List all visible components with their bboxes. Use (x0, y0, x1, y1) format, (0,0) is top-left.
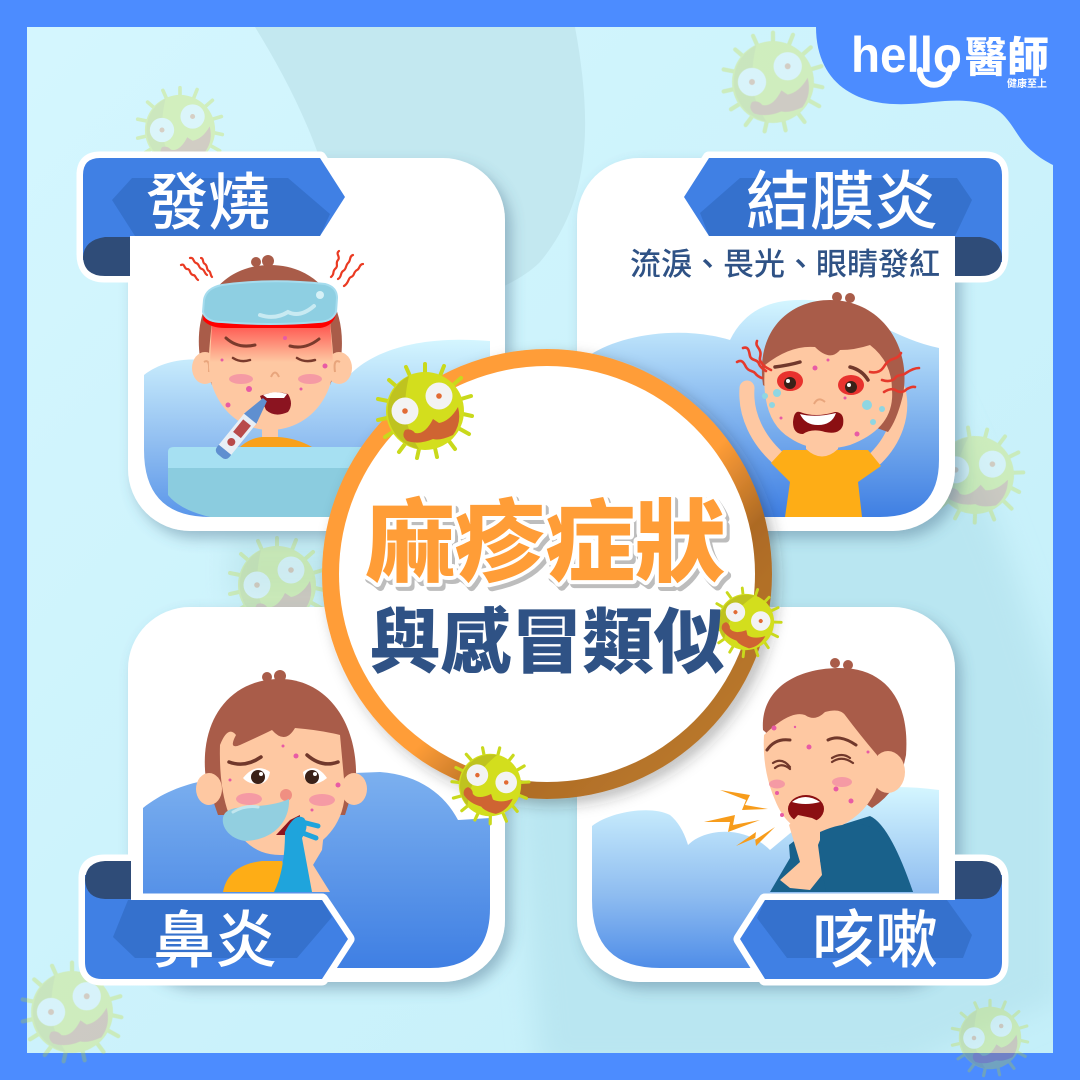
title line 1: 麻疹症狀 (365, 470, 725, 600)
title line 2: 與感冒類似 (369, 586, 725, 688)
panel: conjunctivitis (577, 151, 1002, 531)
germ: top left of badge (378, 364, 472, 458)
illustration backdrop (143, 772, 490, 968)
banner: rhinitis (85, 861, 348, 980)
title shadow: 麻疹症狀 (368, 474, 728, 604)
banner: fever: 發燒 (146, 152, 270, 242)
bed (168, 447, 420, 517)
ice pack (203, 310, 337, 328)
logo: 健康至上 (1007, 75, 1047, 90)
logo: 醫師 (965, 24, 1049, 85)
panel: fever (83, 152, 505, 531)
logo: hello (851, 27, 962, 83)
title text (365, 470, 728, 688)
banner: rhinitis: 鼻炎 (153, 890, 277, 980)
heat squiggles (181, 251, 363, 286)
germ: bottom of badge (437, 732, 543, 838)
banner: conjunctivitis (684, 151, 1002, 276)
boy with red eyes (737, 292, 919, 517)
boy coughing (763, 658, 913, 892)
cough sparks (704, 790, 775, 846)
banner: fever (83, 152, 345, 276)
card (128, 158, 505, 531)
banner: conjunctivitis: 結膜炎 (746, 151, 938, 243)
white disc (339, 366, 755, 782)
logo (816, 24, 1053, 165)
card (128, 607, 505, 982)
subtitle: 流淚、畏光、眼睛發紅 (630, 239, 940, 284)
thermometer (214, 395, 272, 461)
banner: cough: 咳嗽 (812, 890, 938, 981)
illustration backdrop (590, 300, 939, 517)
panel: cough (577, 607, 1002, 982)
boy with fever (181, 251, 363, 447)
card (577, 607, 955, 982)
orange ring (322, 349, 772, 799)
germ: right of badge (698, 574, 794, 670)
boy with runny nose (196, 670, 367, 910)
illustration backdrop (592, 787, 939, 968)
panel: rhinitis (85, 607, 505, 982)
center badge (322, 349, 772, 799)
arms (747, 388, 778, 458)
card (577, 158, 955, 531)
banner: cough (740, 861, 1002, 981)
illustration backdrop (144, 340, 490, 517)
